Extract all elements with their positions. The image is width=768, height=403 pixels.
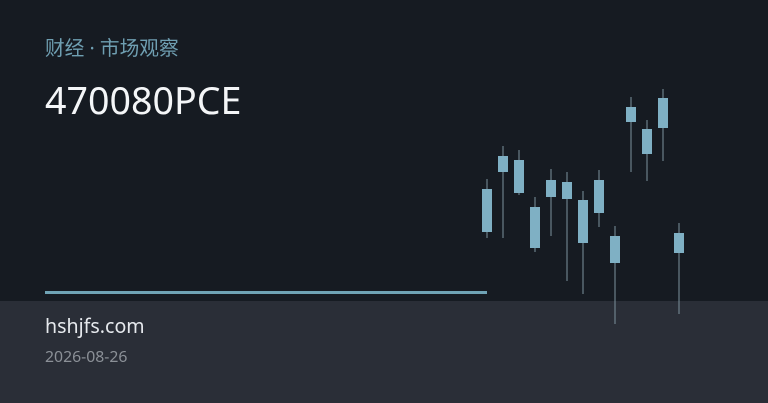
candle 10 [626,97,636,172]
candle 13 [674,223,684,314]
candle 6 [562,172,572,281]
footer band [0,301,768,403]
eyebrow: category label: 财经 · 市场观察 [45,34,179,61]
accent rule [45,291,487,294]
candle 8 [594,170,604,227]
candle 1 [482,179,492,238]
candle 2 [498,146,508,238]
date: 2026-08-26 [45,345,127,367]
candle 7 [578,191,588,294]
title: 470080PCE [45,75,241,126]
candle 3 [514,150,524,195]
candle 12 [658,89,668,161]
candle 4 [530,197,540,252]
candle 5 [546,169,556,236]
domain name: hshjfs.com [45,312,145,338]
candle 11 [642,120,652,181]
candle 9 [610,226,620,324]
